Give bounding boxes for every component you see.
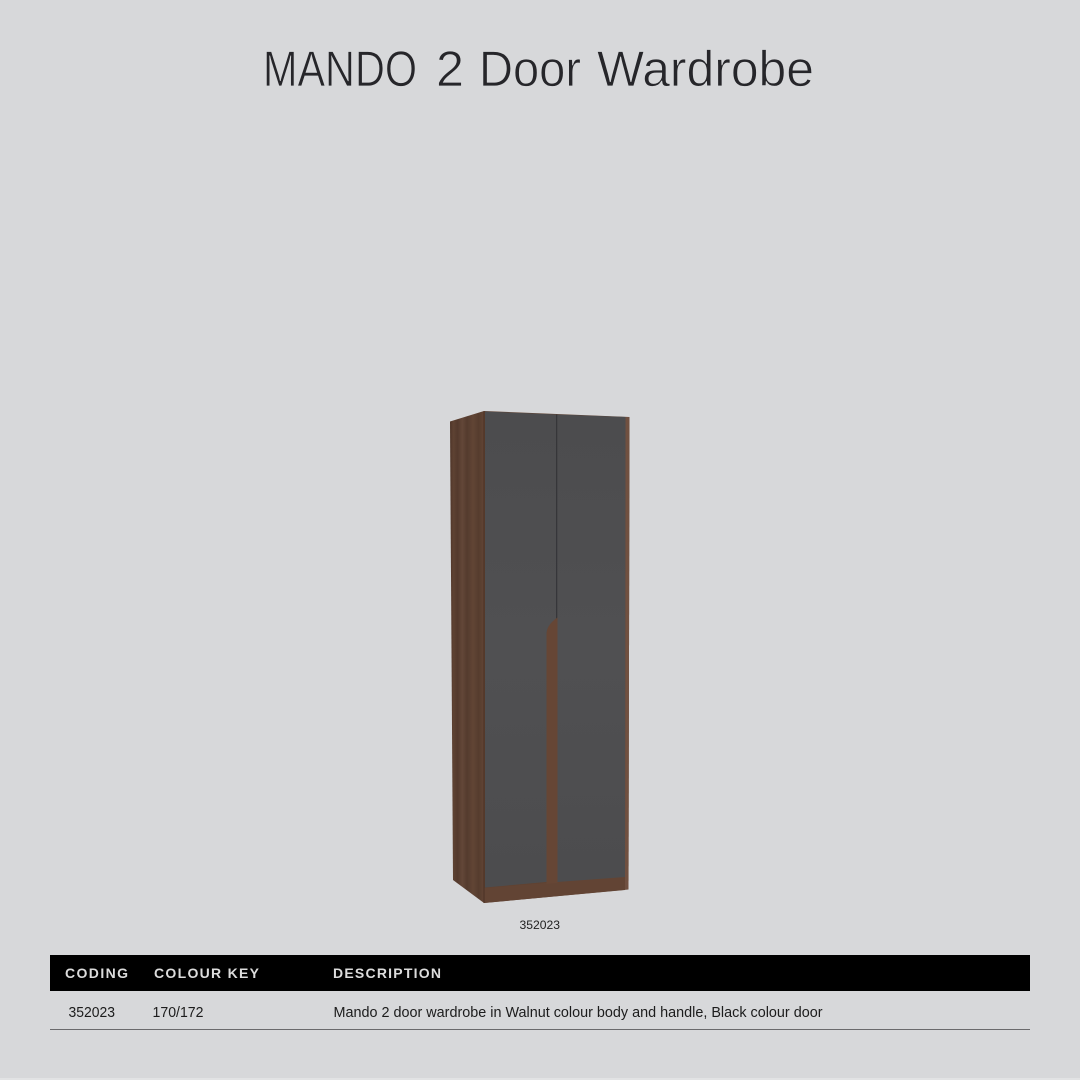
wardrobe front base — [484, 411, 630, 903]
table header bar: COLOUR KEY — [154, 965, 260, 981]
title: Wardrobe — [597, 41, 814, 97]
title — [263, 41, 814, 97]
table row: Mando 2 door wardrobe in Walnut colour body and handle, Black colour door — [334, 1005, 823, 1021]
title: Door — [479, 41, 581, 97]
title: 2 — [436, 41, 464, 97]
table row: 352023 — [68, 1005, 115, 1021]
left door — [485, 412, 556, 888]
product code caption: 352023 — [520, 918, 560, 932]
right door — [557, 414, 626, 882]
wardrobe illustration — [450, 411, 630, 903]
table row — [50, 1005, 1030, 1030]
door handle — [546, 618, 558, 884]
wardrobe plinth — [484, 876, 625, 903]
title: MANDO — [263, 41, 417, 97]
table header bar: CODING — [65, 965, 128, 981]
wardrobe side panel — [450, 411, 484, 903]
wardrobe right edge strip — [625, 417, 630, 890]
table header bar: DESCRIPTION — [333, 965, 441, 981]
table row: 170/172 — [152, 1005, 204, 1021]
door divider line — [556, 414, 558, 619]
table header bar — [50, 955, 1030, 991]
side front corner edge — [483, 411, 485, 903]
specification table — [50, 955, 1030, 1030]
